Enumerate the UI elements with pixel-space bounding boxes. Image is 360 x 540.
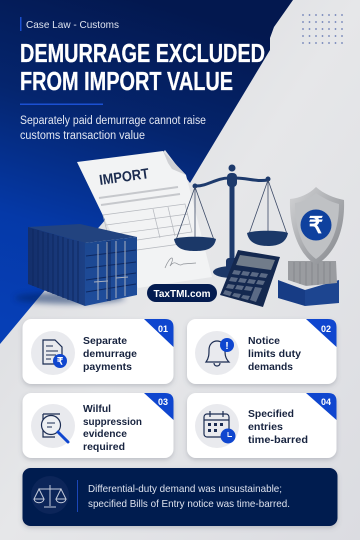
illustration: rupee shield on pedestal — [278, 187, 344, 306]
label — [83, 403, 142, 453]
icon: document with rupee — [31, 331, 75, 375]
title: DEMURRAGE EXCLUDED — [20, 38, 265, 68]
label: Wilful — [83, 403, 111, 415]
label: demurrage — [83, 348, 137, 360]
card 01 — [22, 319, 174, 384]
badge 04 — [306, 393, 336, 420]
label: evidence — [83, 428, 127, 440]
icon: magnified document — [31, 404, 75, 448]
badge 01 — [144, 319, 174, 347]
icon: document with rupee: ₹ — [57, 356, 64, 368]
label: Notice — [248, 335, 280, 347]
label — [248, 408, 308, 446]
dot grid — [302, 14, 343, 44]
subtitle: Separately paid demurrage cannot raise — [20, 115, 206, 127]
illustration: calculator — [220, 250, 280, 307]
illustration: scales of justice — [174, 164, 288, 278]
card 03 — [22, 393, 174, 458]
label: limits duty — [248, 348, 301, 360]
badge 01: 01 — [158, 324, 168, 334]
conclusion text: Differential-duty demand was unsustainable; — [88, 483, 282, 495]
label: required — [83, 441, 125, 453]
icon: calendar with clock — [195, 404, 239, 448]
icon: bell with alert — [195, 331, 239, 375]
label: entries — [248, 421, 283, 433]
card 04 — [187, 393, 336, 458]
card 02 — [187, 319, 336, 384]
label: Separate — [83, 335, 127, 347]
blue diagonal panel — [0, 0, 293, 344]
badge 04: 04 — [321, 397, 331, 407]
title rule — [20, 104, 103, 105]
brand pill: TaxTMI.com — [154, 289, 211, 300]
badge 03: 03 — [158, 397, 168, 407]
label: demands — [248, 361, 293, 373]
icon: bell with alert: ! — [225, 340, 229, 352]
subtitle: customs transaction value — [20, 130, 145, 142]
badge 02 — [306, 319, 336, 347]
illustration: shipping container — [15, 224, 137, 306]
badge 03 — [144, 393, 174, 420]
label: time-barred — [248, 434, 308, 446]
brand pill — [147, 284, 217, 302]
category label: Case Law - Customs — [26, 19, 119, 31]
label — [83, 335, 137, 373]
illustration: import document: IMPORT — [98, 166, 150, 189]
label: suppression — [83, 416, 142, 428]
illustration: rupee shield on pedestal: ₹ — [309, 212, 324, 238]
conclusion text: specified Bills of Entry notice was time-barred. — [88, 498, 290, 510]
conclusion banner — [22, 468, 338, 526]
label — [248, 335, 301, 373]
icon: scales — [31, 476, 69, 514]
title: FROM IMPORT VALUE — [20, 66, 233, 96]
subtitle — [20, 115, 206, 142]
title — [20, 38, 265, 96]
conclusion text — [88, 483, 290, 510]
label: payments — [83, 361, 132, 373]
illustration: import document — [77, 151, 212, 288]
label: Specified — [248, 408, 294, 420]
badge 02: 02 — [321, 324, 331, 334]
